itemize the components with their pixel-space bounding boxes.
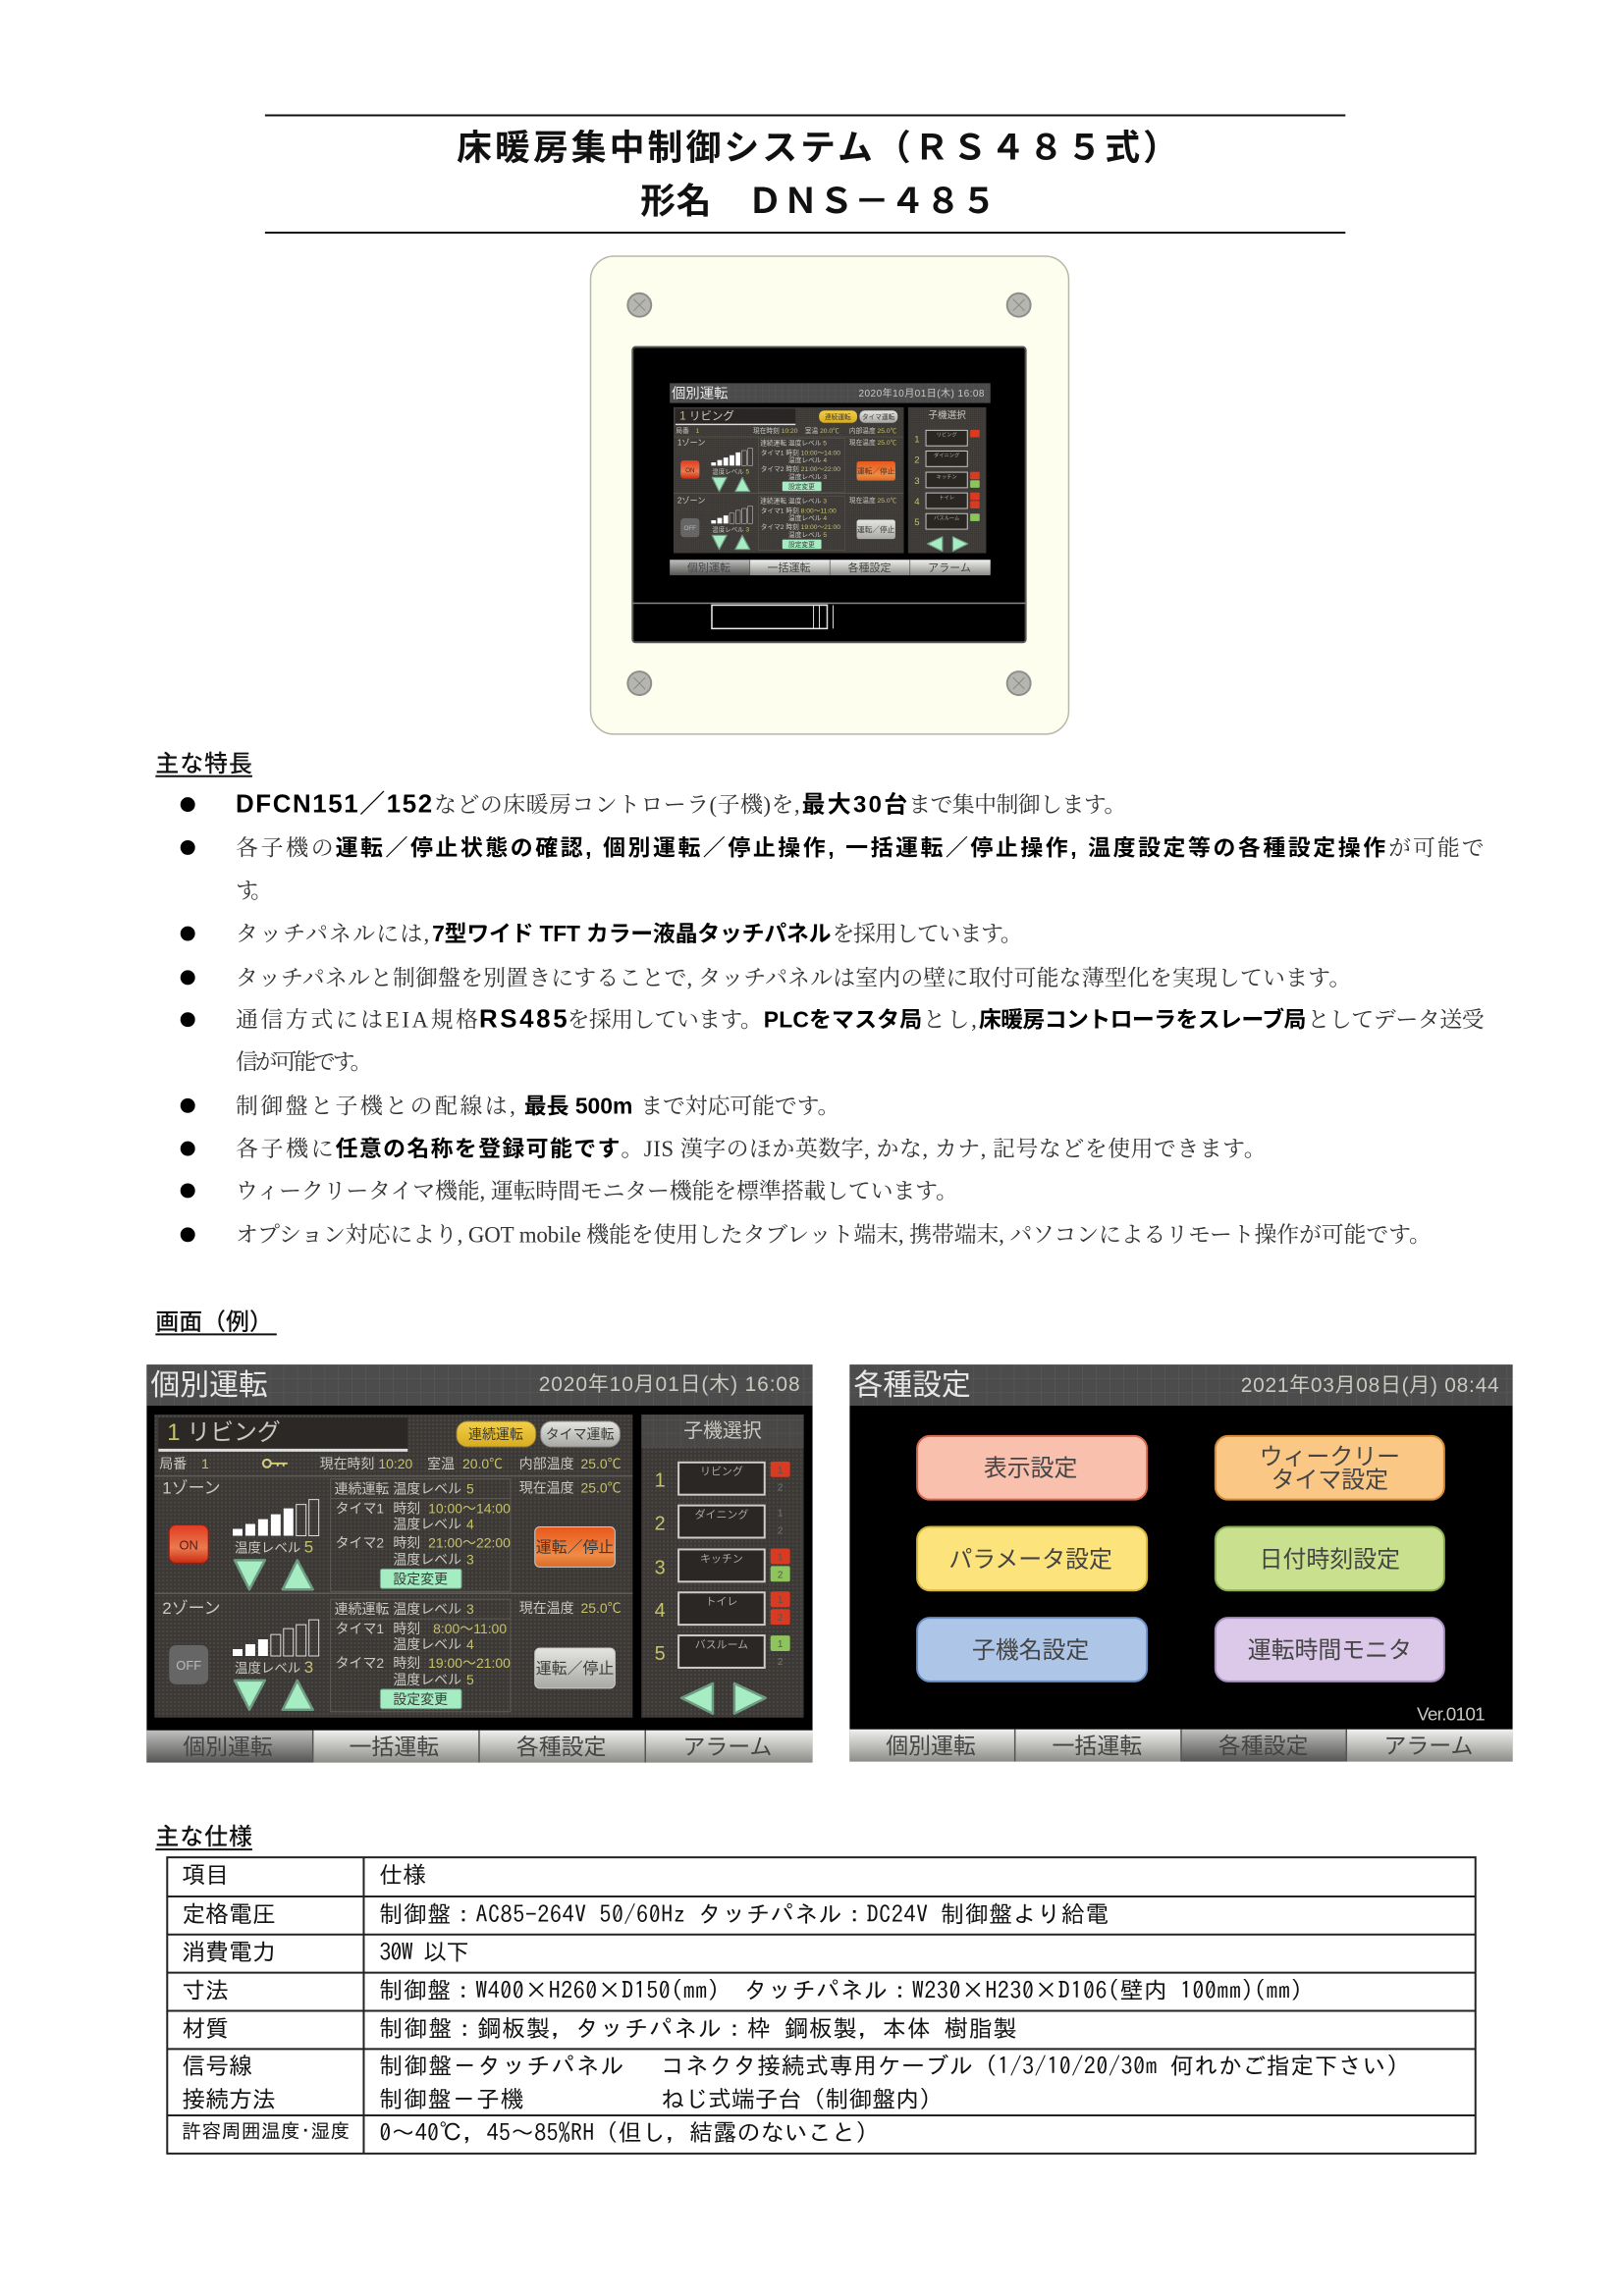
feature 3: タッチパネルには, xyxy=(236,922,429,946)
screen title bar xyxy=(849,1364,1513,1406)
product image: touch panel xyxy=(590,256,1068,734)
zone 2: 5 xyxy=(466,1672,474,1687)
panel: unit selection: リビング xyxy=(700,1465,743,1478)
panel: unit selection: 2 xyxy=(778,1526,784,1537)
panel: unit selection: 5 xyxy=(655,1643,666,1665)
row: header: 仕様 xyxy=(379,1863,426,1887)
button: display settings: 表示設定 xyxy=(984,1456,1077,1482)
panel: unit status: 1 リビング xyxy=(167,1419,281,1446)
specifications table xyxy=(167,1857,1476,2154)
panel: unit selection: キッチン xyxy=(700,1552,743,1565)
zone 2: 運転／停止 xyxy=(536,1660,614,1678)
button: unit names xyxy=(917,1618,1147,1682)
zone 1: 運転／停止 xyxy=(536,1538,614,1556)
small screen in panel: タイマ運転 xyxy=(862,412,895,421)
heading: main features: 主な特長 xyxy=(155,751,252,777)
zone 1: ON xyxy=(179,1537,198,1552)
zone 2 xyxy=(162,1599,622,1712)
small screen in panel: 子機選択 xyxy=(928,409,966,421)
zone 1: 温度レベル xyxy=(393,1481,461,1497)
feature 5 xyxy=(236,1006,1485,1074)
row: ambient conditions: 0～40℃，45～85%RH（但し，結露のないこと） xyxy=(379,2120,879,2144)
feature bullet list xyxy=(181,791,1485,1248)
panel: unit selection: 2 xyxy=(778,1613,784,1624)
small screen in panel: 温度レベル 4 xyxy=(788,455,827,464)
zone 2: タイマ1 xyxy=(336,1621,384,1636)
panel: unit selection: ダイニング xyxy=(695,1508,748,1522)
row: header: 項目 xyxy=(182,1863,229,1887)
status row: 20.0℃ xyxy=(462,1456,503,1471)
small screen in panel: ダイニング xyxy=(934,452,960,459)
small screen in panel: 局番 1 xyxy=(676,427,699,435)
zone 2: 4 xyxy=(466,1636,474,1652)
small screen in panel: 各種設定 xyxy=(847,561,892,574)
feature 5: としてデータ送受 xyxy=(1307,1008,1485,1033)
small screen in panel: 2 xyxy=(914,454,920,465)
feature 8: ウィークリータイマ機能, 運転時間モニター機能を標準搭載しています。 xyxy=(236,1179,958,1203)
feature 1: 最大30台 xyxy=(802,792,907,819)
row: rated voltage: 制御盤：AC85-264V 50/60Hz タッチパネル：DC24V 制御盤より給電 xyxy=(379,1901,1109,1925)
feature 7: 各子機に xyxy=(236,1137,334,1161)
small screen in panel: 2ゾーン xyxy=(677,497,705,506)
small screen in panel: 温度レベル 5 xyxy=(712,466,749,475)
feature 5: PLCをマスタ局 xyxy=(764,1007,922,1033)
button: weekly timer: ウィークリー xyxy=(1260,1444,1400,1470)
row: dimensions: 寸法 xyxy=(182,1978,229,2002)
small screen in panel: キッチン xyxy=(937,473,957,480)
panel: unit selection: 1 xyxy=(778,1509,784,1520)
bullet dots xyxy=(181,797,195,1242)
small screen in panel: 現在温度 25.0℃ xyxy=(849,496,897,505)
feature 6: まで対応可能です。 xyxy=(640,1094,839,1118)
button: weekly timer: タイマ設定 xyxy=(1271,1468,1388,1494)
button: parameters xyxy=(917,1527,1147,1590)
feature 2: が可能で xyxy=(1388,835,1485,860)
row: material: 材質 xyxy=(182,2016,229,2040)
feature 5: 通信方式にはEIA規格 xyxy=(236,1008,478,1033)
zone 1: 温度レベル xyxy=(235,1540,300,1555)
small screen in panel: 連続運転 温度レベル 5 xyxy=(760,439,827,448)
zone 1: タイマ2 xyxy=(336,1534,384,1550)
row: signal wire connection xyxy=(182,2054,1410,2110)
panel: unit selection: 1 xyxy=(655,1470,666,1492)
zone 1: 時刻 xyxy=(393,1501,420,1517)
small screen in panel: リビング xyxy=(937,431,957,439)
zone 1: 21:00～22:00 xyxy=(428,1534,511,1550)
small screen in panel: 一括運転 xyxy=(767,561,811,574)
small screen in panel: バスルーム xyxy=(934,514,959,521)
panel: unit selection: 1 xyxy=(778,1639,784,1650)
small screen in panel: 1 xyxy=(914,434,920,445)
feature 5: とし, xyxy=(923,1008,977,1033)
feature 2 xyxy=(236,834,1485,903)
icon: screw top left xyxy=(627,294,651,317)
button: date and time: 日付時刻設定 xyxy=(1260,1546,1400,1573)
feature 2: 各子機の xyxy=(236,835,334,860)
mode buttons: 連続運転 xyxy=(468,1426,523,1442)
zone 2: 25.0℃ xyxy=(581,1600,622,1616)
small screen in panel: 温度レベル 3 xyxy=(788,472,827,481)
row: power consumption: 30W 以下 xyxy=(379,1940,469,1963)
feature 6 xyxy=(236,1093,839,1118)
bottom tab bar: 個別運転 xyxy=(886,1734,976,1759)
feature 1: などの床暖房コントローラ(子機)を, xyxy=(434,793,800,818)
title: 形名 ＤＮＳ－４８５ xyxy=(640,182,997,221)
button: run time monitor: 運転時間モニタ xyxy=(1248,1637,1412,1664)
zone 1: 5 xyxy=(466,1481,474,1497)
screen title bar: 各種設定 xyxy=(853,1369,971,1402)
zone 1: 1ゾーン xyxy=(162,1479,221,1498)
row: signal wire connection: 制御盤－タッチパネル xyxy=(379,2054,623,2077)
status row: 室温 xyxy=(427,1456,455,1471)
zone 2: 3 xyxy=(304,1658,313,1677)
feature 7: 任意の名称を登録可能です xyxy=(336,1136,620,1161)
panel: unit selection: 1 xyxy=(778,1552,784,1563)
status row: 25.0℃ xyxy=(581,1456,622,1471)
small screen in panel: OFF xyxy=(684,525,696,532)
zone 2: 温度レベル xyxy=(393,1672,461,1687)
zone 2: 時刻 xyxy=(393,1621,420,1636)
feature 5: を採用しています。 xyxy=(568,1008,763,1033)
feature 5: 信が可能です。 xyxy=(236,1049,372,1074)
feature 1: まで集中制御します。 xyxy=(908,793,1126,818)
bottom tab bar xyxy=(849,1730,1513,1762)
zone 1: 10:00～14:00 xyxy=(428,1501,511,1517)
feature 9: オプション対応により, GOT mobile 機能を使用したタブレット端末, 携帯端末, パソコンによるリモート操作が可能です。 xyxy=(236,1223,1432,1248)
zone 1: 現在温度 xyxy=(519,1480,574,1496)
zone 1: 4 xyxy=(466,1517,474,1532)
small screen in panel: 温度レベル 3 xyxy=(712,524,749,533)
small screen in panel: 現在温度 25.0℃ xyxy=(849,438,897,447)
screen title bar: 2020年10月01日(木) 16:08 xyxy=(539,1373,800,1396)
small screen in panel xyxy=(670,383,991,575)
zone 1: 25.0℃ xyxy=(581,1480,622,1496)
feature 5: 床暖房コントローラをスレーブ局 xyxy=(979,1007,1306,1033)
small screen in panel: アラーム xyxy=(928,561,971,574)
zone 2: 現在温度 xyxy=(519,1600,574,1616)
screen title bar xyxy=(146,1364,813,1406)
title: 床暖房集中制御システム（ＲＳ４８５式） xyxy=(457,128,1178,167)
panel: unit selection: トイレ xyxy=(706,1596,737,1608)
feature 4: タッチパネルと制御盤を別置きにすることで, タッチパネルは室内の壁に取付可能な薄型化を実現しています。 xyxy=(236,966,1351,990)
feature 7: 。JIS 漢字のほか英数字, かな, カナ, 記号などを使用できます。 xyxy=(621,1137,1267,1161)
row: signal wire connection: ねじ式端子台（制御盤内） xyxy=(661,2087,943,2110)
feature 7 xyxy=(236,1136,1267,1161)
button: run time monitor xyxy=(1216,1618,1444,1682)
feature 3: を採用しています。 xyxy=(832,922,1023,946)
row: signal wire connection: 制御盤－子機 xyxy=(379,2087,524,2110)
small screen in panel: タイマ2 時刻 21:00～22:00 xyxy=(761,464,840,473)
screen title bar: 2021年03月08日(月) 08:44 xyxy=(1241,1374,1499,1397)
zone 1: 5 xyxy=(304,1537,313,1556)
zone 2: 温度レベル xyxy=(393,1636,461,1652)
small screen in panel: 個別運転 xyxy=(687,561,730,574)
panel: unit selection: 子機選択 xyxy=(683,1419,762,1442)
bottom tab bar: 一括運転 xyxy=(350,1735,439,1760)
bottom tab bar: アラーム xyxy=(682,1735,772,1760)
zone 2: 設定変更 xyxy=(393,1691,448,1707)
title xyxy=(265,116,1345,233)
panel: unit selection: 1 xyxy=(778,1595,784,1606)
row: dimensions: 制御盤：W400×H260×D150(mm) タッチパネル：W230×H230×D106(壁内 100mm)(mm) xyxy=(379,1978,1302,2002)
small screen in panel: 設定変更 xyxy=(788,482,815,491)
mode buttons: タイマ運転 xyxy=(546,1426,614,1442)
bottom tab bar xyxy=(146,1731,813,1763)
small screen in panel: 運転／停止 xyxy=(857,465,895,475)
row: ambient conditions: 許容周囲温度･湿度 xyxy=(182,2121,351,2141)
button: unit names: 子機名設定 xyxy=(972,1637,1089,1664)
status row: 内部温度 xyxy=(519,1456,574,1471)
small screen in panel: 4 xyxy=(914,497,920,507)
small screen in panel: タイマ1 時刻 8:00～11:00 xyxy=(761,506,837,514)
small screen in panel: 連続運転 温度レベル 3 xyxy=(760,497,827,506)
icon: screw top right xyxy=(1007,294,1031,317)
panel: unit selection: 1 xyxy=(778,1466,784,1476)
button: weekly timer xyxy=(1216,1436,1444,1500)
zone 2: 8:00～11:00 xyxy=(433,1621,507,1636)
bottom tab bar: 個別運転 xyxy=(183,1735,273,1760)
panel: unit selection xyxy=(641,1415,804,1718)
row: material: 制御盤：鋼板製，タッチパネル：枠 鋼板製，本体 樹脂製 xyxy=(379,2016,1017,2040)
feature 1: DFCN151／152 xyxy=(236,791,432,819)
zone 1: タイマ1 xyxy=(336,1501,384,1517)
small screen in panel: 連続運転 xyxy=(825,412,851,421)
feature 6: 制御盤と子機との配線は, xyxy=(236,1094,515,1118)
panel: unit selection: 2 xyxy=(778,1570,784,1580)
zone 2: 温度レベル xyxy=(235,1661,300,1676)
zone 2: 温度レベル xyxy=(393,1601,461,1617)
row: signal wire connection: 信号線 xyxy=(182,2054,252,2077)
small screen in panel: 温度レベル 5 xyxy=(788,530,827,539)
zone 2: 時刻 xyxy=(393,1655,420,1671)
small screen in panel: 1ゾーン xyxy=(677,439,705,448)
zone 2: 2ゾーン xyxy=(162,1599,221,1618)
zone 2: 連続運転 xyxy=(335,1601,389,1617)
screen: settings menu xyxy=(849,1364,1513,1762)
zone 2: 19:00～21:00 xyxy=(428,1655,511,1671)
row: signal wire connection: 接続方法 xyxy=(182,2087,276,2110)
panel: unit selection: 2 xyxy=(778,1657,784,1668)
status row: 現在時刻 xyxy=(320,1456,374,1471)
small screen in panel: 3 xyxy=(914,476,920,487)
small screen in panel: ON xyxy=(685,467,694,474)
small screen in panel: 1 リビング xyxy=(679,408,734,422)
feature 5: RS485 xyxy=(479,1006,568,1034)
small screen in panel: 個別運転 xyxy=(672,386,729,402)
status row: 局番 xyxy=(159,1456,187,1471)
small screen in panel: タイマ1 時刻 10:00～14:00 xyxy=(761,448,840,456)
feature 3: 7型ワイド TFT カラー液晶タッチパネル xyxy=(432,921,832,946)
zone 1: 温度レベル xyxy=(393,1551,461,1567)
status row: 10:20 xyxy=(378,1456,413,1471)
small screen in panel: 運転／停止 xyxy=(857,524,895,534)
icon: screw bottom left xyxy=(627,671,651,695)
zone 1 xyxy=(162,1479,622,1591)
row: signal wire connection: コネクタ接続式専用ケーブル（1/3/10/20/30m 何れかご指定下さい） xyxy=(661,2054,1410,2077)
heading: screen examples: 画面（例） xyxy=(155,1308,273,1335)
black bezel xyxy=(632,347,1026,642)
small screen in panel: 内部温度 25.0℃ xyxy=(849,426,897,435)
small screen in panel: 現在時刻 10:20 xyxy=(753,426,798,435)
feature 3 xyxy=(236,921,1023,946)
small screen in panel: タイマ2 時刻 19:00～21:00 xyxy=(761,522,840,531)
panel: unit selection: 2 xyxy=(778,1483,784,1494)
bottom tab bar: 各種設定 xyxy=(1218,1734,1308,1759)
zone 1: 設定変更 xyxy=(393,1571,448,1586)
row: power consumption xyxy=(182,1940,469,1963)
zone 1: 3 xyxy=(466,1551,474,1567)
button: date and time xyxy=(1216,1527,1444,1590)
feature 1 xyxy=(236,791,1126,819)
zone 1: 連続運転 xyxy=(335,1481,389,1497)
small screen in panel: 設定変更 xyxy=(788,540,815,549)
small screen in panel: 2020年10月01日(木) 16:08 xyxy=(858,387,985,400)
panel: unit selection: 2 xyxy=(655,1514,666,1535)
row: power consumption: 消費電力 xyxy=(182,1940,276,1963)
panel: unit selection: 3 xyxy=(655,1557,666,1578)
button: parameters: パラメータ設定 xyxy=(948,1546,1112,1573)
small screen in panel: 5 xyxy=(914,517,920,528)
heading: main specifications: 主な仕様 xyxy=(155,1824,252,1850)
bottom tab bar: アラーム xyxy=(1383,1734,1473,1759)
small screen in panel: 温度レベル 4 xyxy=(788,513,827,522)
icon: screw bottom right xyxy=(1007,671,1031,695)
bottom tab bar: 各種設定 xyxy=(516,1735,606,1760)
small screen in panel: 室温 20.0℃ xyxy=(805,426,839,435)
version label: Ver.0101 xyxy=(1417,1705,1486,1726)
status row: 1 xyxy=(201,1456,209,1471)
feature 6: 最長 500m xyxy=(524,1093,632,1118)
feature 2: す。 xyxy=(236,879,273,903)
bottom tab bar: 一括運転 xyxy=(1053,1734,1142,1759)
status row xyxy=(159,1456,622,1471)
zone 2: OFF xyxy=(176,1658,201,1673)
zone 1: 時刻 xyxy=(393,1534,420,1550)
panel: unit selection: バスルーム xyxy=(695,1638,748,1651)
feature 2: 運転／停止状態の確認, 個別運転／停止操作, 一括運転／停止操作, 温度設定等の各種設定操作 xyxy=(336,834,1385,860)
row: rated voltage: 定格電圧 xyxy=(182,1901,276,1925)
screen title bar: 個別運転 xyxy=(150,1369,268,1402)
zone 2: タイマ2 xyxy=(336,1655,384,1671)
small screen in panel: トイレ xyxy=(939,495,954,501)
mode buttons xyxy=(457,1421,620,1447)
screen: individual operation xyxy=(146,1364,813,1763)
button: display settings xyxy=(917,1436,1147,1500)
row: header xyxy=(182,1863,426,1887)
zone 1: 温度レベル xyxy=(393,1517,461,1532)
panel: unit status xyxy=(154,1415,632,1718)
zone 2: 3 xyxy=(466,1601,474,1617)
panel: unit selection: 4 xyxy=(655,1600,666,1622)
